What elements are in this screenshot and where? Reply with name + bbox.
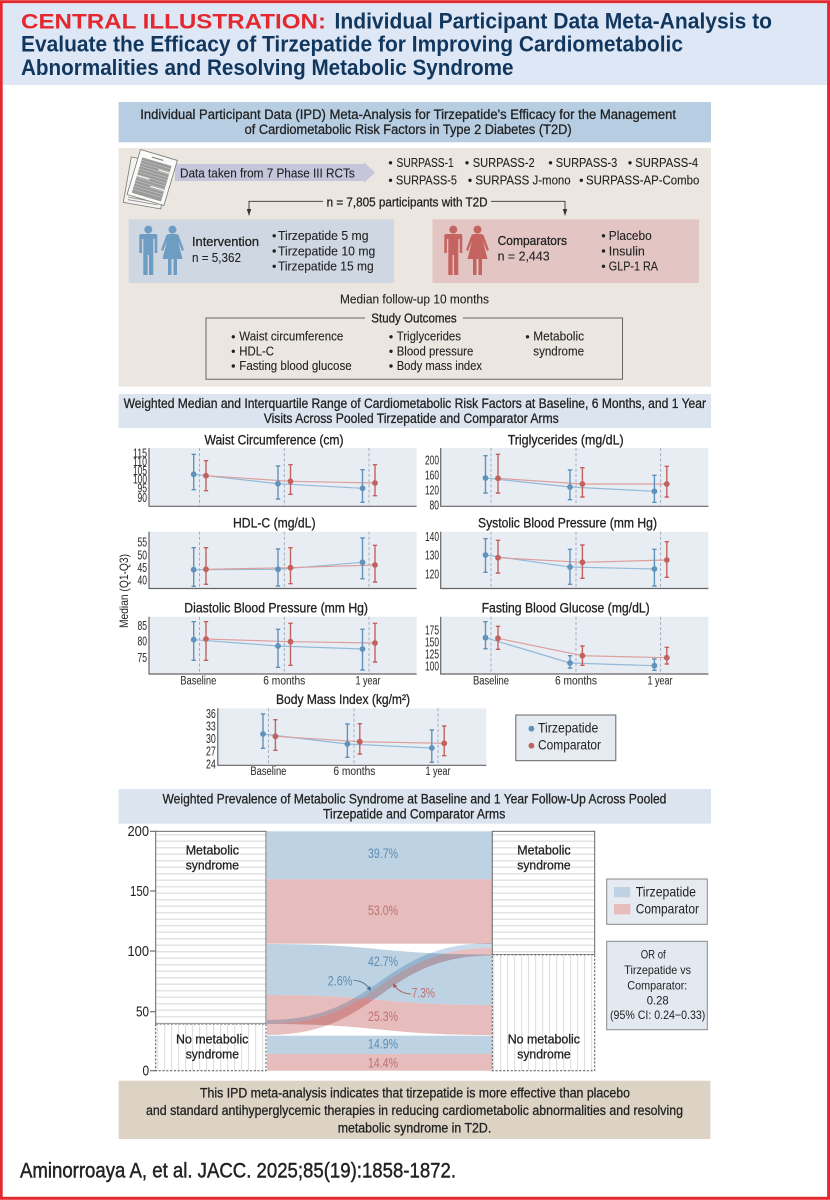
percent labels: 25.3%	[368, 1008, 398, 1024]
chart: HDL-C: 40	[138, 573, 147, 587]
chart: body mass index: Body Mass Index (kg/m²)	[276, 692, 410, 707]
chart: body mass index: 24	[206, 757, 216, 771]
legend: risk factor charts	[516, 715, 616, 761]
callout: odds ratio: Comparator:	[627, 978, 687, 992]
percent labels: 14.4%	[368, 1055, 398, 1071]
chart: fasting blood glucose: 1 year	[648, 676, 673, 688]
chart: fasting blood glucose	[425, 600, 708, 688]
chart: waist circumference: 95	[138, 482, 147, 496]
y axis	[128, 823, 156, 1080]
chart: diastolic blood pressure: 75	[138, 651, 147, 665]
heading: risk factors section	[119, 394, 711, 428]
legend: alluvial	[607, 879, 707, 924]
chart: systolic blood pressure: Systolic Blood Pressure (mm Hg)	[478, 516, 657, 531]
panel: intervention: Tirzepatide 5 mg	[278, 228, 368, 243]
chart: HDL-C: HDL-C (mg/dL)	[233, 516, 316, 531]
chart: diastolic blood pressure: Diastolic Blood Pressure (mm Hg)	[184, 600, 368, 615]
arrow: data source	[175, 162, 375, 183]
percent labels: 7.3%	[412, 984, 435, 1000]
legend: risk factor charts: Tirzepatide	[538, 720, 598, 736]
callout: odds ratio: Tirzepatide vs	[624, 963, 691, 977]
chart: systolic blood pressure: 130	[425, 548, 439, 562]
axis label: median Q1-Q3: Median (Q1-Q3)	[117, 554, 131, 628]
legend: alluvial: Comparator	[636, 901, 699, 917]
chart: waist circumference: 110	[133, 455, 147, 469]
chart: diastolic blood pressure: Baseline	[180, 676, 216, 688]
chart: systolic blood pressure: 120	[425, 568, 439, 582]
percent labels: 42.7%	[368, 953, 398, 969]
chart: body mass index: Baseline	[250, 766, 286, 778]
title banner: CENTRAL ILLUSTRATION:	[21, 10, 326, 34]
heading: metabolic syndrome section: Weighted Prevalence of Metabolic Syndrome at Baseline and 1 Year Follow-Up Across Pooled	[162, 791, 666, 806]
y axis: 100	[128, 943, 149, 960]
chart: body mass index	[206, 692, 486, 778]
panel: intervention: Tirzepatide 15 mg	[278, 259, 374, 274]
chart: systolic blood pressure	[425, 516, 708, 588]
conclusion box: metabolic syndrome in T2D.	[338, 1120, 491, 1135]
bar: follow-up no metabolic syndrome	[492, 955, 595, 1071]
panel: intervention	[129, 219, 394, 283]
chart: fasting blood glucose: 150	[425, 636, 439, 650]
heading: metabolic syndrome section: Tirzepatide and Comparator Arms	[323, 807, 506, 822]
box: study outcomes: Triglycerides	[397, 329, 461, 344]
list: SURPASS trials: SURPASS-AP-Combo	[586, 172, 699, 188]
chart: body mass index: 30	[206, 732, 216, 746]
bar: baseline metabolic syndrome: Metabolic	[186, 842, 239, 857]
bar: follow-up metabolic syndrome: syndrome	[517, 857, 571, 872]
chart: HDL-C: 55	[138, 536, 147, 550]
chart: body mass index: 33	[206, 720, 216, 734]
chart: HDL-C	[138, 516, 417, 588]
panel: intervention: Intervention	[192, 234, 259, 249]
box: study outcomes: Study Outcomes	[371, 311, 457, 326]
percent labels	[328, 845, 435, 1071]
percent labels: 39.7%	[368, 845, 398, 861]
legend: risk factor charts: Comparator	[538, 737, 601, 753]
callout: odds ratio	[607, 941, 707, 1030]
heading: risk factors section: Weighted Median and Interquartile Range of Cardiometabolic Risk Factors at Baseline, 6 Months, and 1 Year	[124, 396, 706, 411]
panel heading: IPD meta-analysis: of Cardiometabolic Risk Factors in Type 2 Diabetes (T2D)	[245, 122, 572, 137]
box: study outcomes: Body mass index	[397, 358, 482, 373]
chart: fasting blood glucose: 175	[425, 623, 439, 637]
bar: follow-up no metabolic syndrome: syndrome	[517, 1046, 571, 1061]
chart: triglycerides	[425, 432, 708, 512]
chart: triglycerides: 200	[425, 454, 439, 468]
panel: comparators: Comparators	[498, 233, 567, 248]
heading: risk factors section: Visits Across Pooled Tirzepatide and Comparator Arms	[264, 411, 559, 426]
chart: alluvial metabolic syndrome	[128, 823, 595, 1080]
icon: documents	[123, 149, 177, 209]
chart: triglycerides: 160	[425, 468, 439, 482]
title banner: Abnormalities and Resolving Metabolic Syndrome	[21, 55, 514, 80]
y axis: 150	[130, 883, 149, 900]
conclusion box	[119, 1081, 710, 1139]
panel heading: IPD meta-analysis	[119, 102, 711, 142]
panel: study design	[119, 148, 711, 387]
panel: comparators: n = 2,443	[498, 248, 550, 263]
chart: waist circumference: 105	[133, 464, 147, 478]
percent labels: 14.9%	[368, 1036, 398, 1052]
title banner: Individual Participant Data Meta-Analysis to	[334, 8, 772, 34]
chart: waist circumference: Waist Circumference (cm)	[204, 432, 344, 447]
panel: comparators	[432, 219, 699, 283]
bar: baseline no metabolic syndrome	[156, 1024, 266, 1071]
box: study outcomes: Waist circumference	[239, 329, 343, 344]
callout: odds ratio: (95% CI: 0.24−0.33)	[610, 1008, 705, 1022]
box: study outcomes: syndrome	[533, 343, 584, 358]
chart: fasting blood glucose: 100	[425, 660, 439, 674]
bar: baseline metabolic syndrome: syndrome	[186, 857, 239, 872]
participant split arrow: n = 7,805 participants with T2D	[327, 195, 488, 210]
list: SURPASS trials	[389, 155, 699, 188]
bar: follow-up no metabolic syndrome: No metabolic	[508, 1031, 580, 1046]
bar: baseline no metabolic syndrome: No metabolic	[176, 1031, 249, 1046]
chart: systolic blood pressure: 140	[425, 530, 439, 544]
list: SURPASS trials: SURPASS-2	[473, 155, 535, 170]
heading: metabolic syndrome section	[119, 789, 711, 824]
chart: body mass index: 36	[206, 707, 216, 721]
percent labels: 2.6%	[328, 972, 352, 988]
list: SURPASS trials: SURPASS-3	[556, 155, 617, 170]
chart: body mass index: 27	[206, 745, 216, 759]
icon: intervention people	[139, 226, 184, 275]
bar: follow-up metabolic syndrome	[492, 831, 595, 955]
panel heading: IPD meta-analysis: Individual Participant Data (IPD) Meta-Analysis for Tirzepatide's Efficacy for the Management	[140, 107, 676, 122]
citation: Aminorroaya A, et al. JACC. 2025;85(19):1858-1872.	[20, 1159, 456, 1182]
icon: comparator people	[444, 226, 489, 275]
chart: fasting blood glucose: Fasting Blood Glucose (mg/dL)	[482, 600, 650, 615]
conclusion box: This IPD meta-analysis indicates that tirzepatide is more effective than placebo	[200, 1086, 630, 1101]
percent labels: 53.0%	[368, 902, 398, 918]
list: SURPASS trials: SURPASS-4	[635, 155, 698, 170]
y axis: 50	[136, 1004, 149, 1021]
chart: waist circumference: 90	[138, 491, 147, 505]
chart: waist circumference: 115	[133, 446, 147, 460]
box: study outcomes: Blood pressure	[397, 343, 473, 358]
chart: triglycerides: 120	[425, 484, 439, 498]
chart: waist circumference: 100	[133, 472, 147, 486]
chart: body mass index: 1 year	[426, 766, 451, 778]
panel: comparators: Placebo	[609, 228, 652, 243]
title banner: Evaluate the Efficacy of Tirzepatide for Improving Cardiometabolic	[21, 32, 683, 57]
chart: triglycerides: 80	[430, 498, 439, 512]
box: study outcomes: Metabolic	[533, 329, 584, 344]
panel: comparators: Insulin	[609, 243, 645, 258]
chart: diastolic blood pressure: 80	[138, 635, 147, 649]
chart: fasting blood glucose: Baseline	[473, 676, 509, 688]
legend: alluvial: Tirzepatide	[636, 884, 696, 900]
chart: diastolic blood pressure: 1 year	[356, 676, 381, 688]
box: study outcomes	[206, 311, 622, 379]
arrow: 7.3% callout	[393, 983, 411, 994]
bar: baseline metabolic syndrome	[156, 831, 266, 1024]
bar: follow-up metabolic syndrome: Metabolic	[517, 842, 571, 857]
y axis: 0	[142, 1063, 149, 1080]
participant split arrow	[247, 195, 567, 216]
chart: triglycerides: Triglycerides (mg/dL)	[508, 432, 624, 447]
callout: odds ratio: 0.28	[647, 993, 669, 1007]
chart: fasting blood glucose: 6 months	[555, 676, 597, 688]
flow bands	[267, 831, 492, 1071]
chart: diastolic blood pressure: 85	[138, 619, 147, 633]
bar: baseline no metabolic syndrome: syndrome	[186, 1046, 239, 1061]
chart: body mass index: 6 months	[333, 766, 376, 778]
box: study outcomes: HDL-C	[239, 343, 274, 358]
panel: comparators: GLP-1 RA	[609, 259, 658, 274]
list: SURPASS trials: SURPASS-5	[396, 172, 457, 188]
panel: intervention: n = 5,362	[192, 250, 241, 265]
list: SURPASS trials: SURPASS-1	[396, 155, 454, 170]
chart: HDL-C: 45	[138, 561, 147, 575]
chart: fasting blood glucose: 125	[425, 648, 439, 662]
chart: diastolic blood pressure	[138, 600, 417, 688]
title banner	[3, 3, 827, 85]
list: SURPASS trials: SURPASS J-mono	[475, 172, 571, 188]
box: study outcomes: Fasting blood glucose	[239, 358, 352, 373]
callout: odds ratio: OR of	[641, 948, 666, 962]
chart: HDL-C: 50	[138, 548, 147, 562]
arrow: data source: Data taken from 7 Phase III RCTs	[180, 165, 355, 180]
text: median follow-up: Median follow-up 10 months	[340, 292, 489, 307]
conclusion box: and standard antihyperglycemic therapies in reducing cardiometabolic abnormalities and resolving	[146, 1103, 683, 1118]
arrow: 2.6% callout	[353, 980, 371, 991]
y axis: 200	[128, 823, 149, 840]
panel: intervention: Tirzepatide 10 mg	[278, 243, 375, 258]
chart: waist circumference	[133, 432, 417, 506]
chart: diastolic blood pressure: 6 months	[263, 676, 306, 688]
